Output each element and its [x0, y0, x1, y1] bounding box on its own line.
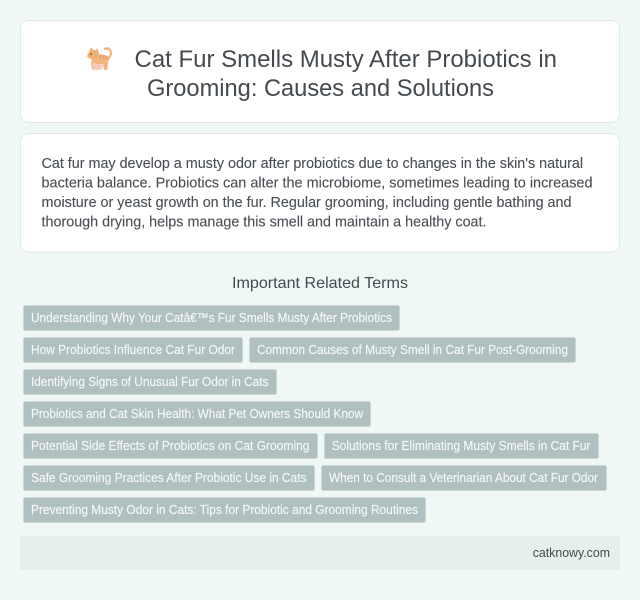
title text: Cat Fur Smells Musty After Probiotics in — [134, 46, 557, 73]
footer source text: catknowy.com — [533, 545, 610, 560]
description panel — [20, 134, 620, 252]
heading: important related terms: Important Related Terms — [232, 275, 408, 292]
description text: bacteria balance. Probiotics can alter the microbiome, sometimes leading to increased — [42, 174, 592, 192]
tag — [324, 434, 598, 458]
tag — [24, 498, 426, 522]
tag — [322, 466, 606, 490]
footer bar — [20, 536, 620, 570]
tag: Understanding Why Your Catâ€™s Fur Smells Musty After Probiotics — [31, 310, 392, 325]
description text: Cat fur may develop a musty odor after probiotics due to changes in the skin's natural — [42, 155, 583, 172]
tag: Probiotics and Cat Skin Health: What Pet Owners Should Know — [31, 406, 364, 421]
tag — [24, 466, 314, 490]
tag: Potential Side Effects of Probiotics on Cat Grooming — [31, 438, 310, 453]
tag: Safe Grooming Practices After Probiotic Use in Cats — [31, 470, 307, 485]
tag — [24, 402, 370, 426]
tag: Preventing Musty Odor in Cats: Tips for Probiotic and Grooming Routines — [31, 502, 418, 517]
title panel — [20, 20, 620, 122]
description text: moisture or yeast growth on the fur. Regular grooming, including gentle bathing and — [42, 194, 572, 211]
tag — [24, 370, 276, 394]
tag: When to Consult a Veterinarian About Cat Fur Odor — [329, 470, 599, 485]
title text — [134, 46, 557, 102]
tag — [24, 306, 400, 330]
related terms tags — [24, 306, 606, 522]
title text: Grooming: Causes and Solutions — [147, 75, 494, 102]
icon: cat — [87, 47, 112, 70]
tag: Identifying Signs of Unusual Fur Odor in Cats — [31, 374, 269, 389]
tag — [24, 338, 242, 362]
tag — [250, 338, 576, 362]
description text — [42, 155, 592, 230]
tag — [24, 434, 318, 458]
tag: How Probiotics Influence Cat Fur Odor — [31, 342, 236, 357]
tag: Common Causes of Musty Smell in Cat Fur Post-Grooming — [257, 342, 568, 357]
tag: Solutions for Eliminating Musty Smells in Cat Fur — [332, 438, 591, 453]
description text: thorough drying, helps manage this smell and maintain a healthy coat. — [42, 214, 486, 230]
